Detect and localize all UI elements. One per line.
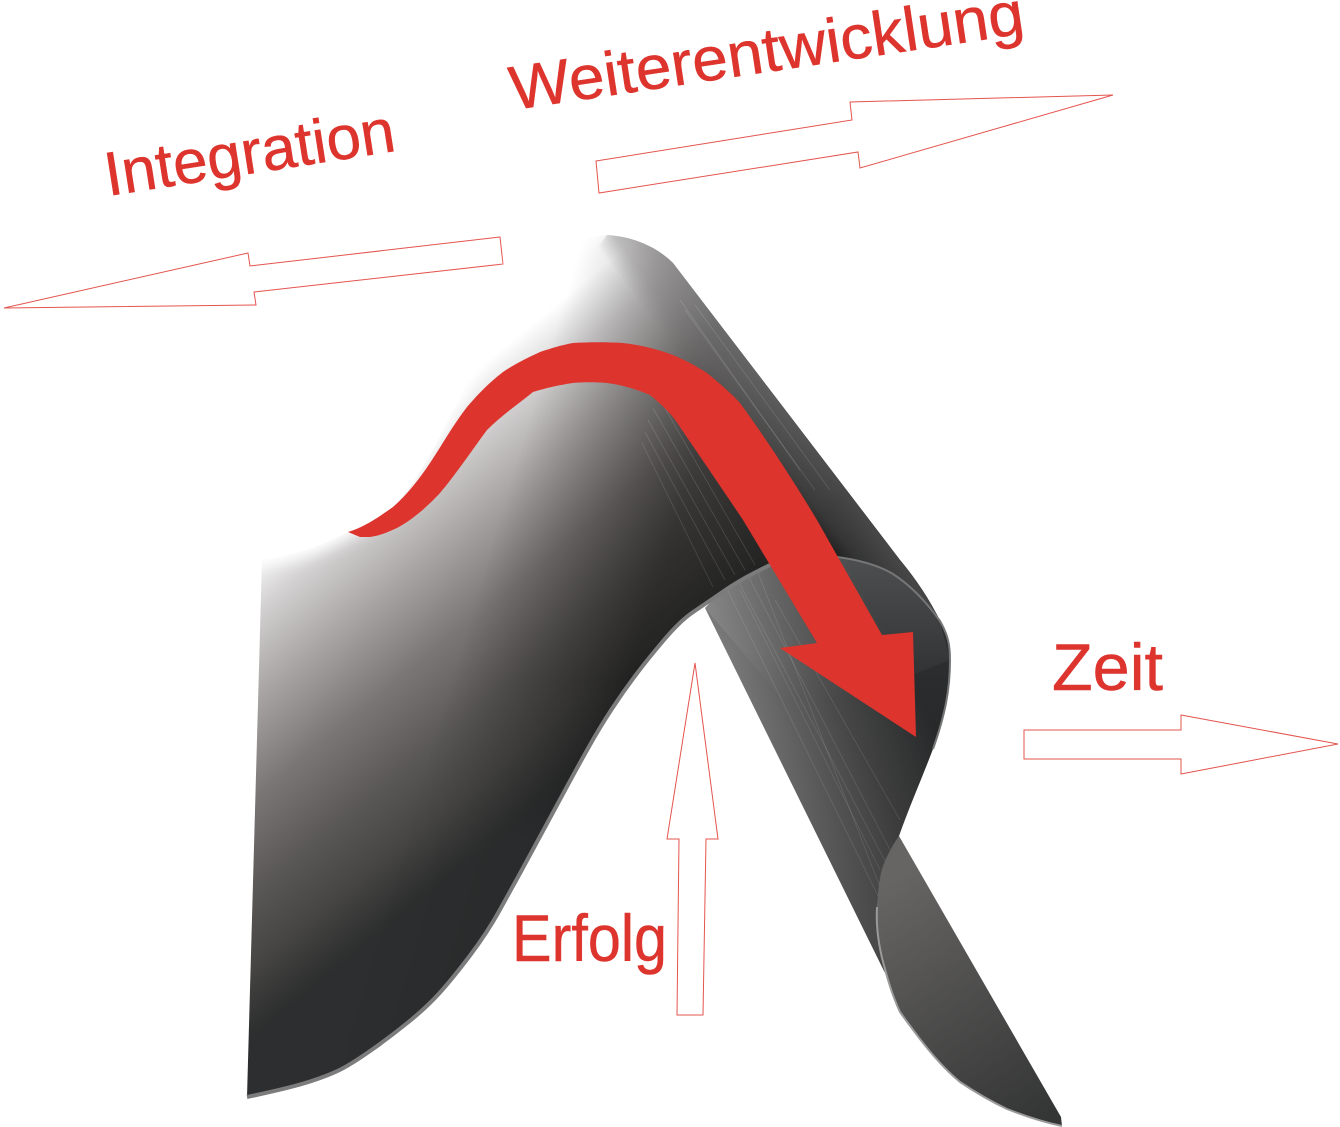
ribbon: strip top highlight — [705, 556, 950, 720]
label: Integration: Integration — [99, 96, 400, 210]
arrow: Integration — [4, 237, 503, 308]
ribbon: upper ridge shading — [600, 235, 938, 616]
label: Erfolg: Erfolg — [512, 901, 667, 975]
ribbon: front curve — [247, 235, 940, 1097]
ribbon: right-side darkening — [482, 235, 936, 787]
ribbon surface — [247, 226, 1062, 1126]
arrow: Weiterentwicklung — [596, 95, 1113, 193]
ribbon: inner fold strip — [705, 556, 950, 973]
ribbon: edge of lower leaf — [877, 907, 1062, 1126]
arrow: Erfolg — [667, 663, 718, 1015]
label: Zeit: Zeit — [1052, 630, 1163, 704]
ribbon: fine highlights on front — [642, 300, 830, 587]
ribbon: lower leaf — [877, 836, 1062, 1126]
ribbon: white fade along top silhouette — [250, 226, 602, 556]
red process arrow — [348, 342, 916, 737]
ribbon: strip fine highlights — [725, 565, 900, 900]
arrow: Zeit — [1024, 715, 1338, 774]
ribbon: edge of front curve — [247, 565, 770, 1097]
ribbon: strip lower darkening — [705, 608, 950, 973]
ribbon: edge of fold arc — [770, 556, 950, 749]
